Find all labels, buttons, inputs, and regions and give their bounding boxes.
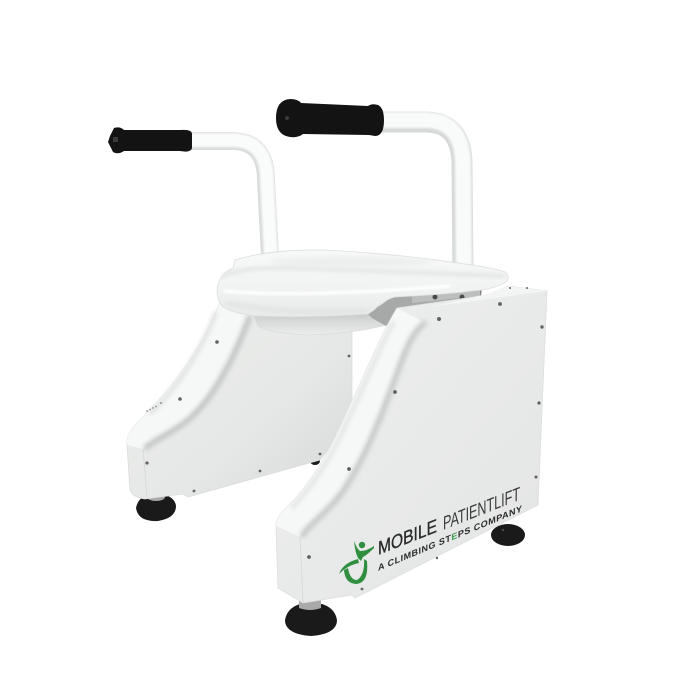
rear hidden foot <box>310 457 320 465</box>
left grip <box>108 127 192 153</box>
logo icon: green figure on wheel <box>339 541 374 584</box>
left body housing <box>127 296 352 499</box>
brand logo <box>339 483 523 584</box>
left foot <box>136 493 176 521</box>
curved band of left body <box>127 296 248 449</box>
bracket bolts <box>432 294 438 300</box>
left tube <box>190 141 270 256</box>
logo tagline: A CLIMBING STEPS COMPANY <box>378 503 523 573</box>
bucket under seat <box>252 305 398 335</box>
logo wordmark second word: PATIENTLIFT <box>443 483 520 535</box>
front body housing <box>276 286 547 603</box>
front foot <box>285 600 337 636</box>
grey bracket <box>368 287 482 326</box>
right handle <box>276 99 464 276</box>
left handle <box>108 127 271 256</box>
top surface of front body <box>430 286 547 307</box>
right tube <box>381 122 463 276</box>
right rear foot <box>491 524 525 546</box>
curved band of front body <box>276 308 424 537</box>
right grip <box>276 99 384 137</box>
fixing rivets <box>145 287 544 590</box>
seat <box>217 250 508 317</box>
seat rim shading <box>222 268 505 277</box>
logo wordmark: MOBILE <box>378 515 437 560</box>
serial marks <box>146 402 162 412</box>
